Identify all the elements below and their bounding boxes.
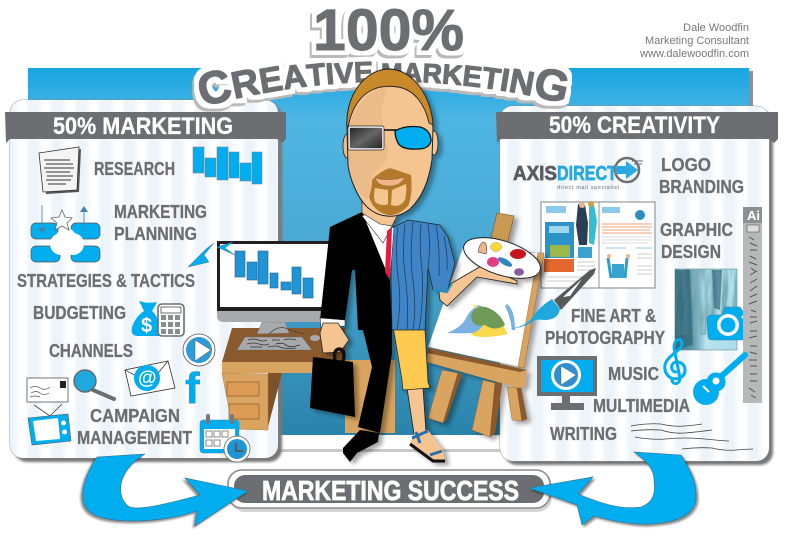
title: 100% creative marketing <box>192 0 572 112</box>
casual leg <box>407 388 445 461</box>
icon: research bar chart <box>193 147 262 184</box>
heading banner: 50% marketing: 50% MARKETING <box>53 113 233 140</box>
credit: author details: Dale Woodfin <box>683 22 749 34</box>
desk drawers <box>222 373 282 430</box>
shoe <box>343 430 379 462</box>
label: marketing planning: MARKETING <box>114 202 207 222</box>
sunglasses <box>348 126 431 150</box>
icon: camera <box>707 307 750 340</box>
easel top post <box>491 213 514 245</box>
heading banner: 50% marketing <box>5 112 286 143</box>
logo: axis direct <box>513 158 643 191</box>
label: budgeting: BUDGETING <box>33 303 126 323</box>
shirt collar <box>362 212 392 243</box>
label: campaign management <box>77 406 192 448</box>
easel upright <box>518 253 544 368</box>
label: campaign management: CAMPAIGN <box>90 406 180 426</box>
label: campaign management: MANAGEMENT <box>77 428 192 448</box>
arrow: creativity to success <box>529 452 696 525</box>
arrowheads pointing to strategies <box>188 242 235 267</box>
computer monitor <box>217 241 330 334</box>
keyboard <box>237 337 312 350</box>
toolbar: illustrator tools <box>743 207 762 403</box>
illustration: man half suit half casual <box>310 69 545 462</box>
briefcase <box>310 349 355 417</box>
illustration: desk and computer <box>188 241 395 433</box>
icon: multimedia monitor <box>537 356 597 410</box>
hair <box>347 69 433 128</box>
goatee <box>369 168 412 215</box>
credit: author details: www.dalewoodfin.com <box>639 48 749 60</box>
face shading <box>349 87 388 200</box>
ears <box>343 134 351 158</box>
panel: 50% creativity <box>496 106 778 465</box>
logo: axis direct: DIRECT <box>557 163 617 185</box>
easel shelf <box>427 348 527 388</box>
heading banner: 50% creativity: 50% CREATIVITY <box>549 112 720 139</box>
label: fine art and photography: PHOTOGRAPHY <box>545 328 665 348</box>
panel: 50% marketing <box>5 100 286 462</box>
icon: money bag and calculator: $ <box>141 315 152 337</box>
paint splash <box>447 303 515 337</box>
icon: treble clef <box>665 339 685 384</box>
label: channels: CHANNELS <box>49 341 133 361</box>
cuff <box>320 318 345 328</box>
arm with skin <box>439 265 517 306</box>
icon: magnifying glass <box>74 370 114 399</box>
face <box>347 69 433 216</box>
icon: guitar <box>693 355 745 405</box>
title line: creative marketing: CREATIVE MARKETING <box>192 56 572 112</box>
label: strategies and tactics: STRATEGIES & TACTICS <box>17 271 195 291</box>
canvas <box>428 247 540 367</box>
label: logo branding: LOGO <box>661 155 711 175</box>
label: fine art and photography <box>545 306 665 348</box>
label: fine art and photography: FINE ART & <box>571 306 656 326</box>
toolbar: illustrator tools: Ai <box>747 208 760 223</box>
label: logo branding <box>659 155 744 197</box>
credit: author details: Marketing Consultant <box>645 35 749 47</box>
blue striped shirt <box>391 220 455 330</box>
label: research: RESEARCH <box>94 159 175 179</box>
neck <box>362 200 405 226</box>
icon: facebook: f <box>185 364 200 413</box>
label: writing: WRITING <box>550 424 617 444</box>
label: logo branding: BRANDING <box>659 177 744 197</box>
label: music: MUSIC <box>608 364 659 384</box>
label: graphic design <box>660 220 733 262</box>
label: multimedia: MULTIMEDIA <box>593 396 690 416</box>
arrow: marketing to success <box>83 454 248 526</box>
monitor bar chart <box>235 251 313 298</box>
logo: axis direct: direct mail specialist <box>557 185 619 191</box>
photograph of forest <box>675 269 737 350</box>
icon: research document <box>39 147 81 194</box>
hand <box>320 323 349 353</box>
label: graphic design: GRAPHIC <box>660 220 733 240</box>
logo: axis direct: AXIS <box>513 163 557 185</box>
palette <box>459 229 545 287</box>
red tie <box>385 227 392 280</box>
label: graphic design: DESIGN <box>661 242 721 262</box>
banner: marketing success: MARKETING SUCCESS <box>262 475 519 506</box>
label: marketing planning <box>114 202 207 244</box>
desk top <box>222 328 352 373</box>
easel legs <box>428 370 527 437</box>
yellow shorts <box>392 320 430 390</box>
head <box>343 69 438 216</box>
banner: marketing success <box>228 470 552 512</box>
label: marketing planning: PLANNING <box>114 224 197 244</box>
mouth <box>375 177 405 186</box>
brochure sample <box>541 201 655 288</box>
icon: money bag and calculator <box>132 301 184 337</box>
writing squiggles <box>631 424 753 450</box>
icon: email envelope <box>125 361 175 396</box>
white shirt <box>360 215 394 280</box>
icon: postcard <box>27 378 68 402</box>
heading banner: 50% creativity <box>496 112 778 143</box>
credit: author details <box>639 22 749 60</box>
mouse <box>310 335 320 341</box>
icon: television <box>28 404 71 445</box>
icon: planning diagram <box>31 205 100 262</box>
paintbrush <box>510 268 596 329</box>
icon: calendar and clock <box>200 414 250 462</box>
illustration: easel and canvas <box>427 213 544 437</box>
blue background panel <box>28 68 753 452</box>
desk pedestal right <box>345 360 395 433</box>
black jacket <box>320 212 392 330</box>
icon: email envelope: @ <box>138 368 157 389</box>
black trousers <box>358 330 392 433</box>
icon: video play button <box>183 334 215 366</box>
